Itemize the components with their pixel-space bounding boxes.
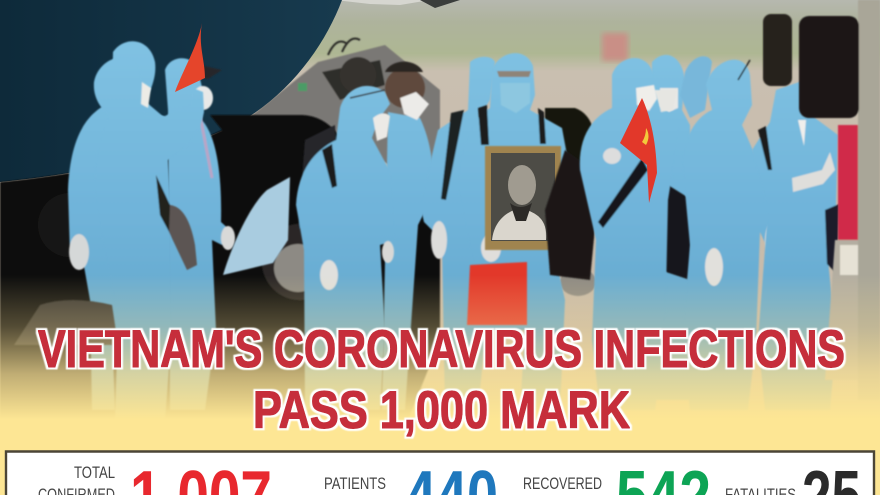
fade to yellow (0, 275, 880, 453)
person: seen from back (682, 60, 782, 410)
label: recovered: RECOVERED (523, 474, 602, 493)
person: hooded with backpack (296, 86, 396, 410)
person: with small flag (580, 58, 680, 410)
landing gear (240, 38, 440, 190)
person: far left with hood (68, 41, 165, 410)
stat: patients (325, 470, 496, 495)
person: hood in background (420, 57, 495, 410)
person: wearing cap (165, 58, 235, 410)
portrait in frame (485, 146, 561, 250)
person: bald man with mask (382, 62, 433, 410)
person: holding portrait (458, 53, 572, 410)
dark ground and wheels (0, 108, 596, 440)
label: total confirmed (38, 466, 115, 495)
title (38, 320, 845, 440)
red plastic bag (467, 262, 527, 325)
person: front raising flag (94, 57, 204, 420)
label: total confirmed: TOTAL (74, 463, 115, 482)
person: hood at back (680, 56, 712, 118)
white sealed bag (223, 177, 290, 275)
person: background right of centre (640, 55, 695, 400)
title line 2: PASS 1,000 MARK (253, 381, 630, 440)
stat: recovered (524, 470, 708, 495)
duffel bag at left (14, 300, 118, 345)
label: patients: PATIENTS (324, 474, 386, 493)
stat: total confirmed (38, 466, 270, 495)
Vietnamese flag held up (175, 23, 205, 92)
truck mirrors and cab (763, 0, 880, 400)
small red flag (620, 98, 657, 203)
panel background (6, 452, 874, 495)
aircraft fuselage (0, 0, 342, 182)
panel: statistics (6, 452, 874, 495)
person: at right with gloves (752, 80, 839, 410)
stat: fatalities (726, 470, 858, 495)
black shoulder bags (545, 150, 692, 280)
